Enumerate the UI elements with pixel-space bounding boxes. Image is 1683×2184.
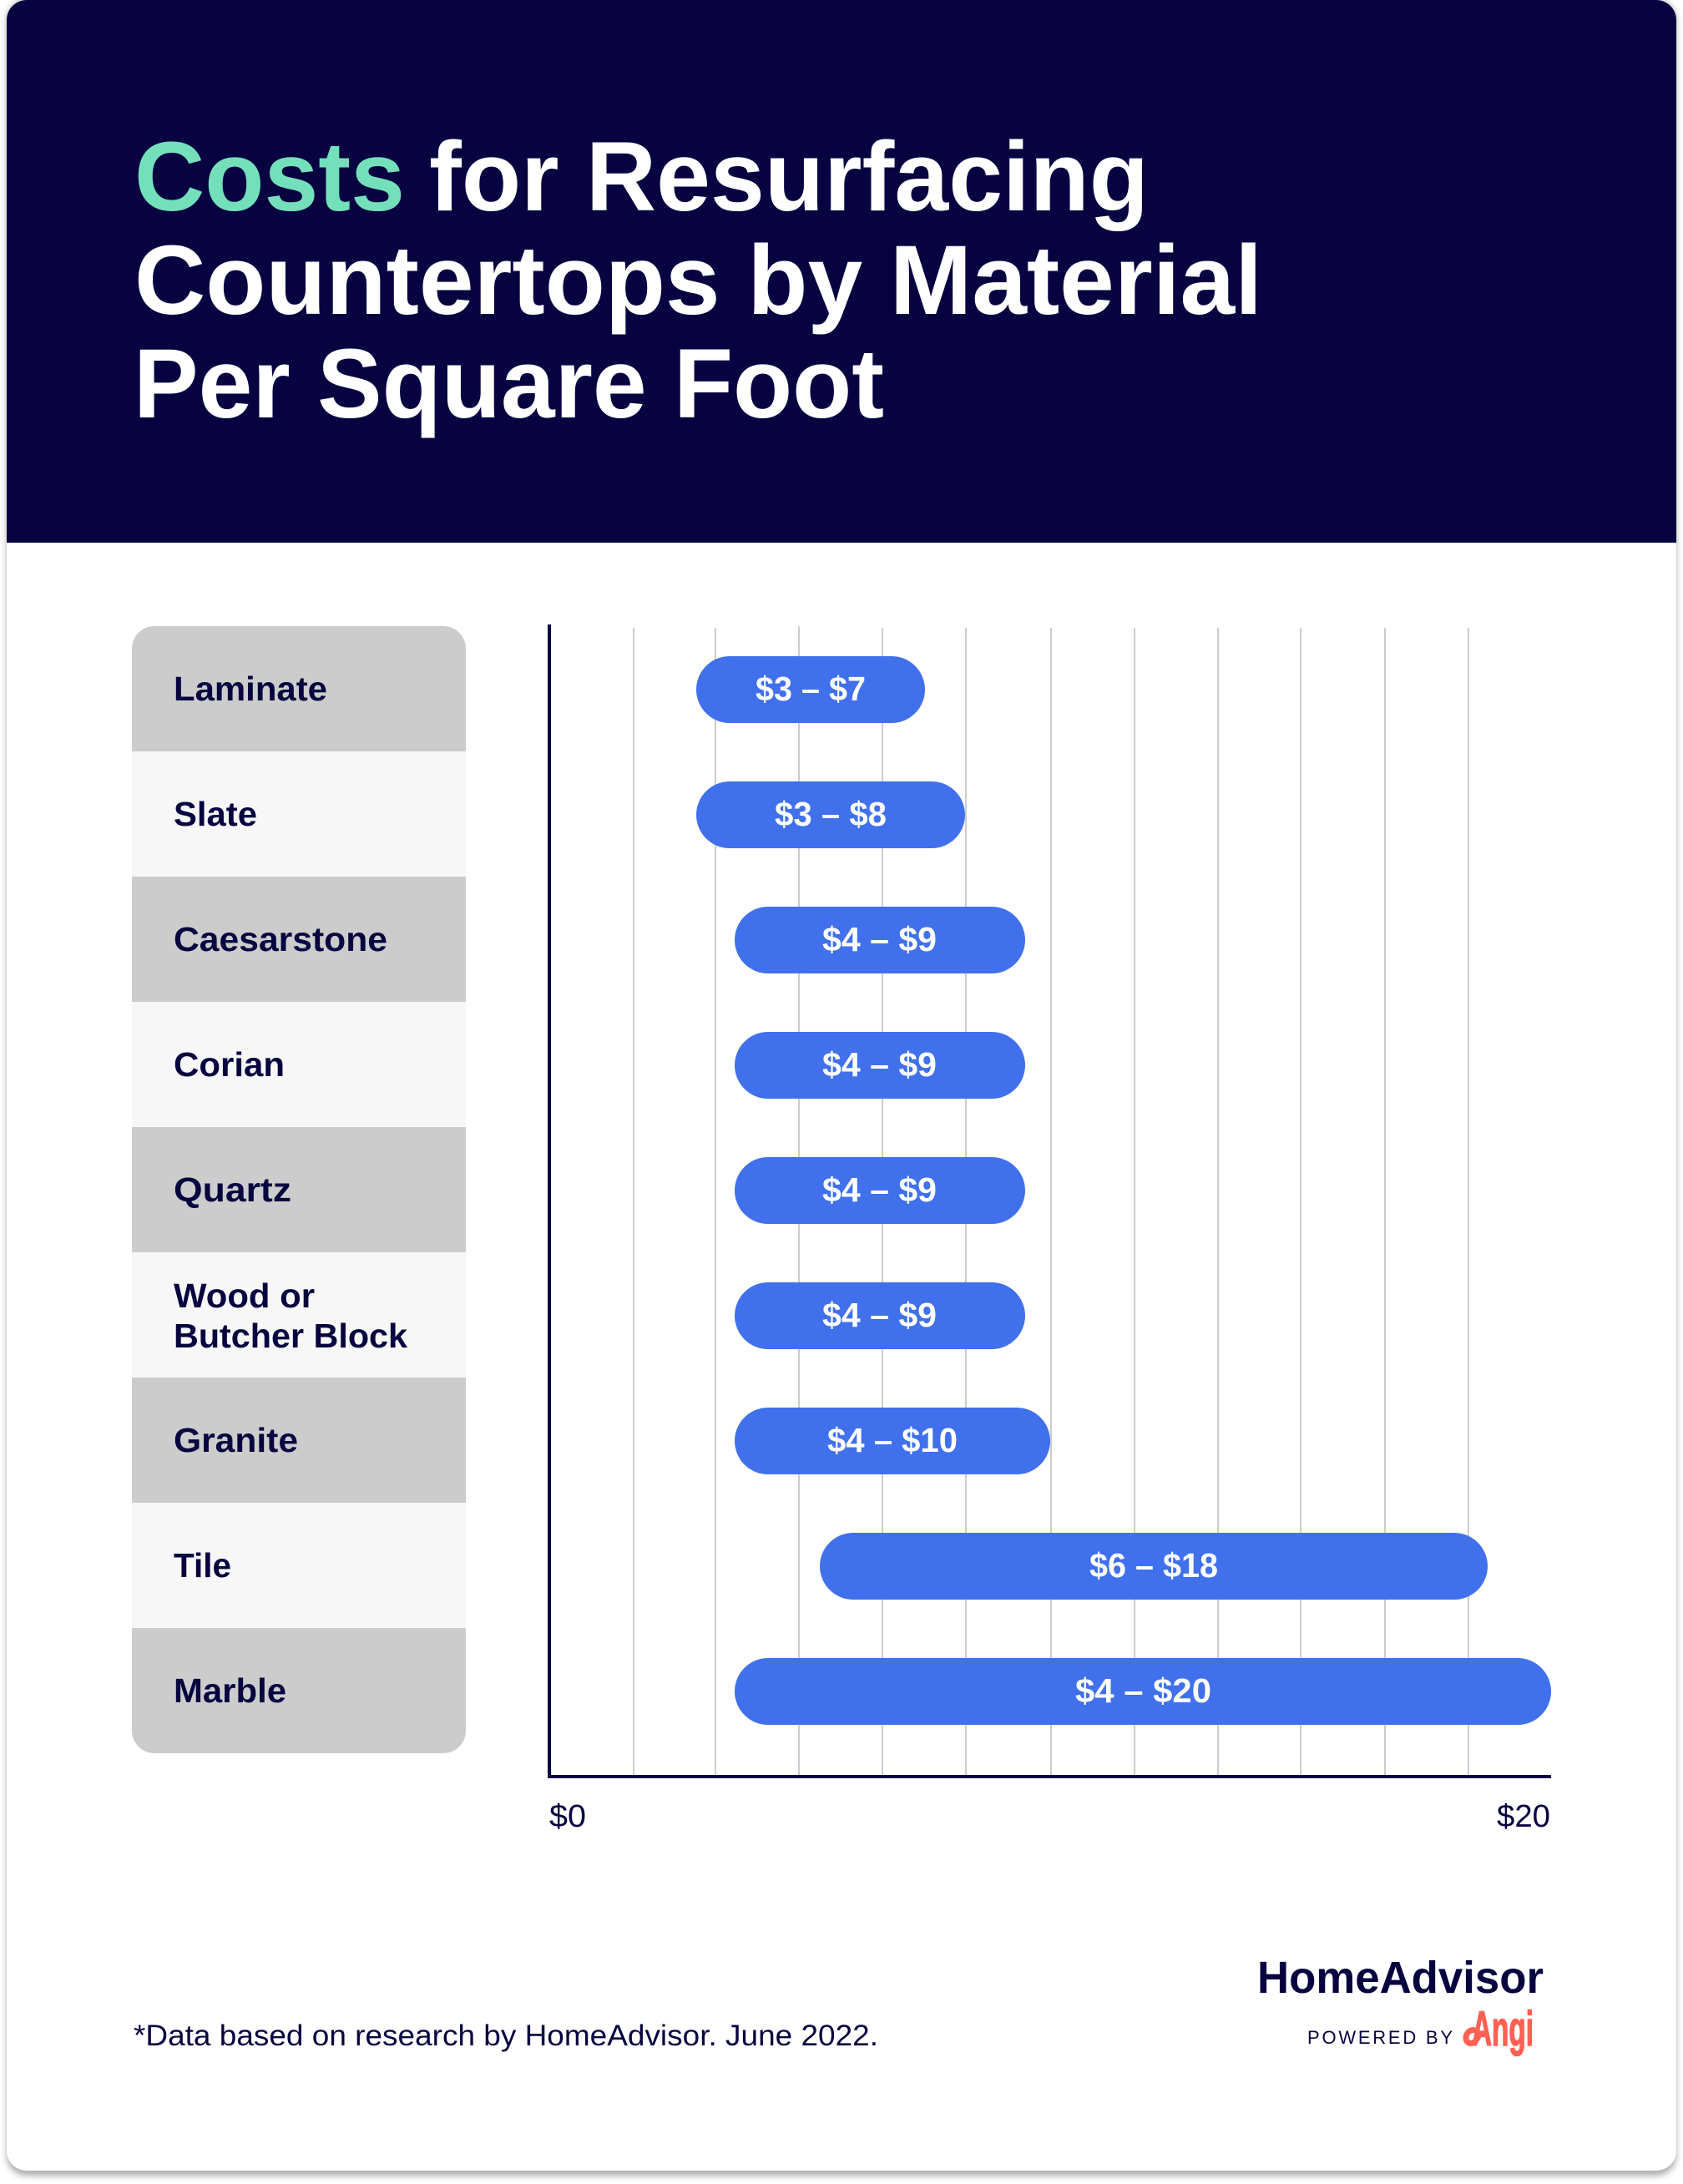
bar: slate: $3 – $8 bbox=[775, 795, 887, 833]
axis label: $20: $20 bbox=[1497, 1799, 1550, 1834]
axis label: $0: $0 bbox=[549, 1799, 586, 1834]
bar: caesarstone bbox=[735, 907, 1025, 973]
material labels panel: Caesarstone bbox=[174, 920, 387, 958]
title: Per Square Foot bbox=[134, 329, 884, 439]
bar: granite bbox=[735, 1408, 1050, 1474]
material labels panel: Slate bbox=[174, 795, 257, 833]
bar: tile: $6 – $18 bbox=[1089, 1546, 1218, 1585]
logo: HomeAdvisor powered by Angi bbox=[1257, 1953, 1544, 2056]
header panel bbox=[7, 0, 1676, 543]
title: for Resurfacing bbox=[429, 122, 1149, 232]
bar: granite: $4 – $10 bbox=[827, 1421, 958, 1459]
material labels panel: Marble bbox=[174, 1671, 286, 1710]
bar: wood or butcher block bbox=[735, 1282, 1025, 1349]
bar: quartz bbox=[735, 1157, 1025, 1224]
material labels panel: Laminate bbox=[174, 670, 327, 708]
title: Countertops by Material bbox=[134, 225, 1262, 336]
material labels panel: Butcher Block bbox=[174, 1317, 407, 1355]
bar: marble: $4 – $20 bbox=[1075, 1671, 1211, 1710]
bar: caesarstone: $4 – $9 bbox=[822, 920, 937, 958]
footnote: *Data based on research by HomeAdvisor. June 2022. bbox=[134, 2020, 878, 2052]
material labels panel: Tile bbox=[174, 1546, 231, 1585]
bar: wood or butcher block: $4 – $9 bbox=[822, 1296, 937, 1334]
bar: corian: $4 – $9 bbox=[822, 1045, 937, 1084]
logo: HomeAdvisor powered by Angi: POWERED BY bbox=[1307, 2027, 1453, 2048]
bar: tile bbox=[820, 1533, 1488, 1600]
material labels panel: Granite bbox=[174, 1421, 298, 1459]
grid lines bbox=[633, 626, 1469, 1775]
bar: marble bbox=[735, 1658, 1551, 1725]
bar: quartz: $4 – $9 bbox=[822, 1170, 937, 1209]
title: Costs bbox=[134, 122, 405, 232]
material labels panel: Corian bbox=[174, 1045, 285, 1084]
logo: HomeAdvisor powered by Angi: Angi bbox=[1472, 2002, 1534, 2056]
logo: HomeAdvisor powered by Angi: HomeAdvisor bbox=[1257, 1953, 1544, 2003]
bar: laminate bbox=[696, 656, 925, 723]
title bbox=[134, 122, 1262, 439]
bar: laminate: $3 – $7 bbox=[756, 670, 866, 708]
material labels panel: Wood or bbox=[174, 1277, 315, 1315]
bar: corian bbox=[735, 1032, 1025, 1099]
chart axes bbox=[548, 624, 1551, 1778]
bar: slate bbox=[696, 781, 965, 848]
material labels panel: Quartz bbox=[174, 1170, 291, 1209]
material labels panel bbox=[132, 626, 466, 1753]
